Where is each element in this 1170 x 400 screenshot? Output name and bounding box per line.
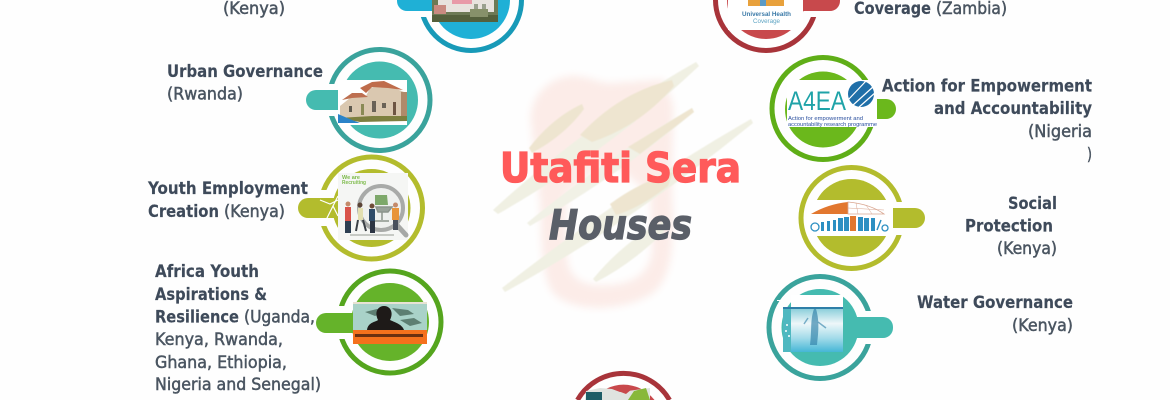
title: Utafiti Sera — [500, 144, 741, 192]
text: water governance — [917, 292, 1073, 335]
text: africa youth aspirations: Africa Youth — [155, 261, 259, 281]
ring — [769, 276, 871, 378]
text: africa youth aspirations: Resilience — [155, 307, 239, 327]
text: urban governance: (Rwanda) — [167, 84, 243, 104]
image: recruiting poster: Recruiting — [342, 180, 366, 186]
handle — [316, 313, 366, 333]
disc — [592, 385, 654, 400]
handle — [790, 0, 840, 11]
image: rwanda houses — [338, 80, 407, 125]
image: estate building — [432, 0, 498, 22]
image: A4EA logo: Action for empowerment and — [788, 116, 863, 122]
panel: bottom house — [578, 373, 670, 400]
text: A4EA: (Nigeria — [1028, 121, 1092, 141]
handle — [397, 0, 457, 11]
handle — [880, 208, 925, 228]
ring gap — [332, 306, 362, 339]
text: A4EA: Action for Empowerment — [882, 76, 1092, 96]
ring gap — [795, 0, 825, 17]
icon: light bulb lines — [320, 196, 338, 220]
handle — [298, 198, 348, 218]
panel: universal health coverage — [716, 0, 840, 50]
image: aspirations report cover — [353, 302, 427, 344]
image: umbrella and people — [807, 200, 893, 236]
image: recruiting poster: We are — [342, 175, 360, 181]
image: UHC logo: Universal Health — [742, 11, 791, 18]
image: A4EA logo: accountability research programme — [788, 122, 877, 128]
panel: social protection — [801, 168, 925, 268]
ring gap — [885, 202, 915, 235]
text: africa youth aspirations: (Uganda, — [244, 307, 315, 327]
ring — [329, 50, 430, 150]
text: social protection — [965, 193, 1057, 258]
image: A4EA logo: A4EA — [788, 86, 846, 116]
disc — [782, 289, 858, 366]
ring gap — [410, 0, 450, 17]
text: africa youth aspirations: Aspirations & — [155, 284, 267, 304]
image: recruiting poster — [338, 173, 408, 240]
text: youth employment — [147, 178, 308, 221]
panel: water governance — [769, 276, 893, 378]
panel: A4EA — [772, 58, 896, 160]
ring — [801, 168, 902, 268]
text: A4EA: and Accountability — [934, 98, 1092, 118]
panel: youth employment — [298, 157, 422, 259]
text: A4EA: ) — [1087, 144, 1092, 164]
ring — [716, 0, 816, 50]
text: urban governance: Urban Governance — [167, 61, 323, 81]
disc — [727, 0, 805, 39]
disc — [785, 72, 861, 148]
image: UHC logo — [728, 0, 803, 30]
disc — [332, 169, 410, 247]
ring gap — [312, 190, 348, 226]
text: social protection: (Kenya) — [997, 238, 1057, 258]
ring — [578, 373, 670, 400]
text: africa youth aspirations: Ghana, Ethiopia, — [155, 352, 287, 372]
background emblem: beige brush strokes — [493, 62, 753, 292]
text: africa youth aspirations: Nigeria and Senegal) — [155, 374, 321, 394]
panel: africa youth aspirations — [316, 271, 441, 373]
panel: urban governance — [306, 50, 430, 150]
image: A4EA logo — [787, 80, 877, 128]
image: bottom photo — [585, 387, 650, 400]
ring gap — [320, 84, 360, 116]
disc — [341, 62, 418, 138]
ring — [320, 157, 422, 259]
ring — [339, 271, 441, 373]
handle — [866, 99, 896, 119]
text: youth employment: Creation — [148, 201, 219, 221]
disc — [351, 283, 429, 361]
panel: top left blue house — [397, 0, 522, 50]
text: youth employment: Youth Employment — [147, 178, 308, 198]
text: universal health coverage — [854, 0, 1007, 18]
ring — [420, 0, 522, 50]
text: water governance: Water Governance — [917, 292, 1073, 312]
text: social protection: Social — [1008, 193, 1057, 213]
ring gap — [855, 311, 880, 344]
subtitle: Houses — [549, 201, 692, 249]
handle — [306, 90, 356, 110]
text: youth employment: (Kenya) — [224, 201, 285, 221]
image: water splash — [777, 295, 843, 352]
text: water governance: (Kenya) — [1012, 315, 1073, 335]
text: urban governance — [167, 61, 323, 104]
image: UHC logo: Coverage — [753, 18, 780, 25]
text: africa youth aspirations — [155, 261, 321, 394]
disc — [432, 0, 510, 39]
background emblem: pale red blob — [531, 76, 673, 308]
text: social protection: Protection — [965, 216, 1053, 236]
text: africa youth aspirations: Kenya, Rwanda, — [155, 329, 283, 349]
disc — [812, 179, 890, 257]
text: A4EA — [882, 76, 1092, 164]
handle — [840, 317, 893, 338]
ring — [772, 58, 874, 160]
